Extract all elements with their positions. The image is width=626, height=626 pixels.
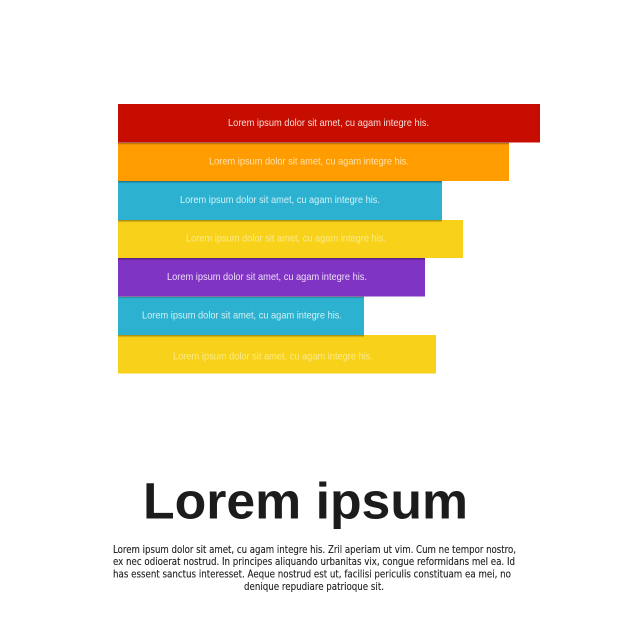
bar 1: red: Lorem ipsum dolor sit amet, cu agam integre his. xyxy=(228,117,429,129)
bar 1: red xyxy=(118,104,540,145)
bar 5: purple xyxy=(118,258,425,298)
bar 5: purple: Lorem ipsum dolor sit amet, cu agam integre his. xyxy=(167,271,367,283)
bar chart: stacked horizontal bars xyxy=(118,104,540,374)
bar 2: orange xyxy=(118,143,509,184)
bar 2: orange: Lorem ipsum dolor sit amet, cu agam integre his. xyxy=(209,156,409,168)
bar 7: yellow: Lorem ipsum dolor sit amet, cu agam integre his. xyxy=(173,350,373,362)
bar 6: blue xyxy=(118,297,364,338)
body text block: denique repudiare patrioque sit. xyxy=(244,581,384,593)
bar 3: blue: Lorem ipsum dolor sit amet, cu agam integre his. xyxy=(180,194,380,206)
body text block xyxy=(113,544,516,593)
body text block: Lorem ipsum dolor sit amet, cu agam integre his. Zril aperiam ut vim. Cum ne tempor nostro, xyxy=(113,544,516,556)
bar 4: yellow xyxy=(118,220,463,260)
body text block: has essent sanctus interesset. Aeque nostrud est ut, facilisi periculis constituam ea mei, no xyxy=(113,568,511,580)
title: Lorem ipsum xyxy=(143,472,468,530)
bar 6: blue: Lorem ipsum dolor sit amet, cu agam integre his. xyxy=(142,310,342,322)
bar 3: blue xyxy=(118,181,442,222)
bar 4: yellow: Lorem ipsum dolor sit amet, cu agam integre his. xyxy=(186,232,386,244)
body text block: ex nec odioerat nostrud. In principes aliquando urbanitas vix, congue reformidans mel ea. Id xyxy=(113,556,515,568)
bar 7: yellow xyxy=(118,335,436,374)
